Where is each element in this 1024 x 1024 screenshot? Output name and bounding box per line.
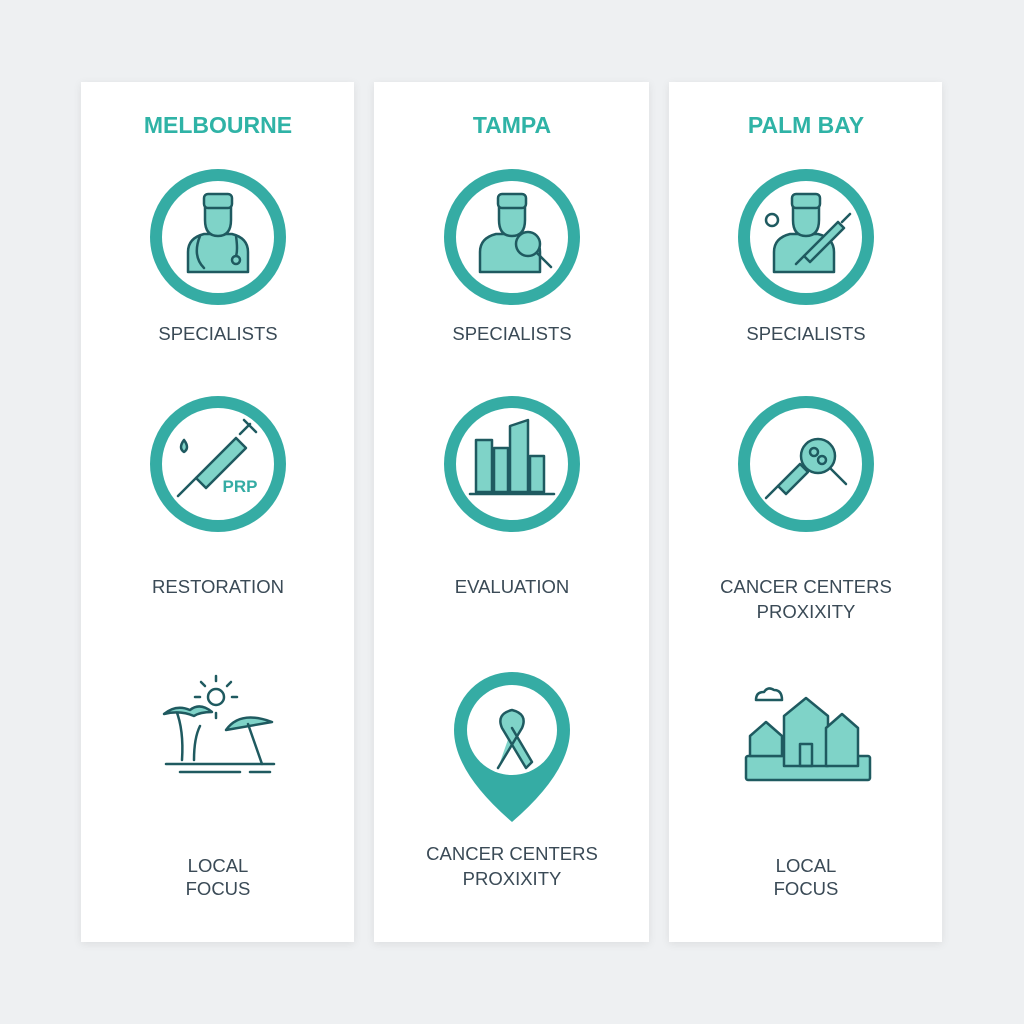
icon: houses	[746, 688, 870, 780]
icon: doctor with syringe	[744, 175, 868, 299]
icon: PRP syringe	[156, 402, 280, 526]
icon: doctor with magnifier	[450, 175, 574, 299]
label: RESTORATION	[152, 576, 284, 597]
panel: Palm Bay: FOCUS	[774, 878, 838, 899]
icon: PRP syringe: PRP	[223, 477, 257, 496]
label: EVALUATION	[455, 576, 569, 597]
title: Palm Bay: PALM BAY	[748, 112, 864, 138]
panel: Palm Bay	[669, 82, 942, 942]
panel: Tampa	[374, 82, 649, 942]
title: Tampa: TAMPA	[473, 112, 551, 138]
icon: syringe magnifier	[744, 402, 868, 526]
panel: Tampa: PROXIXITY	[463, 868, 561, 889]
panel: Melbourne	[81, 82, 354, 942]
label: CANCER CENTERS	[426, 843, 598, 864]
icon: city	[450, 402, 574, 526]
label: LOCAL	[188, 855, 248, 876]
icon: ribbon pin	[454, 672, 570, 822]
panel: Palm Bay: PROXIXITY	[757, 601, 855, 622]
title: Melbourne: MELBOURNE	[144, 112, 292, 138]
icon: doctor	[156, 175, 280, 299]
label: SPECIALISTS	[746, 323, 866, 344]
label: LOCAL	[776, 855, 836, 876]
label: CANCER CENTERS	[720, 576, 892, 597]
label: SPECIALISTS	[452, 323, 572, 344]
icon: beach	[164, 676, 274, 772]
panel: Melbourne: FOCUS	[186, 878, 250, 899]
label: SPECIALISTS	[158, 323, 278, 344]
